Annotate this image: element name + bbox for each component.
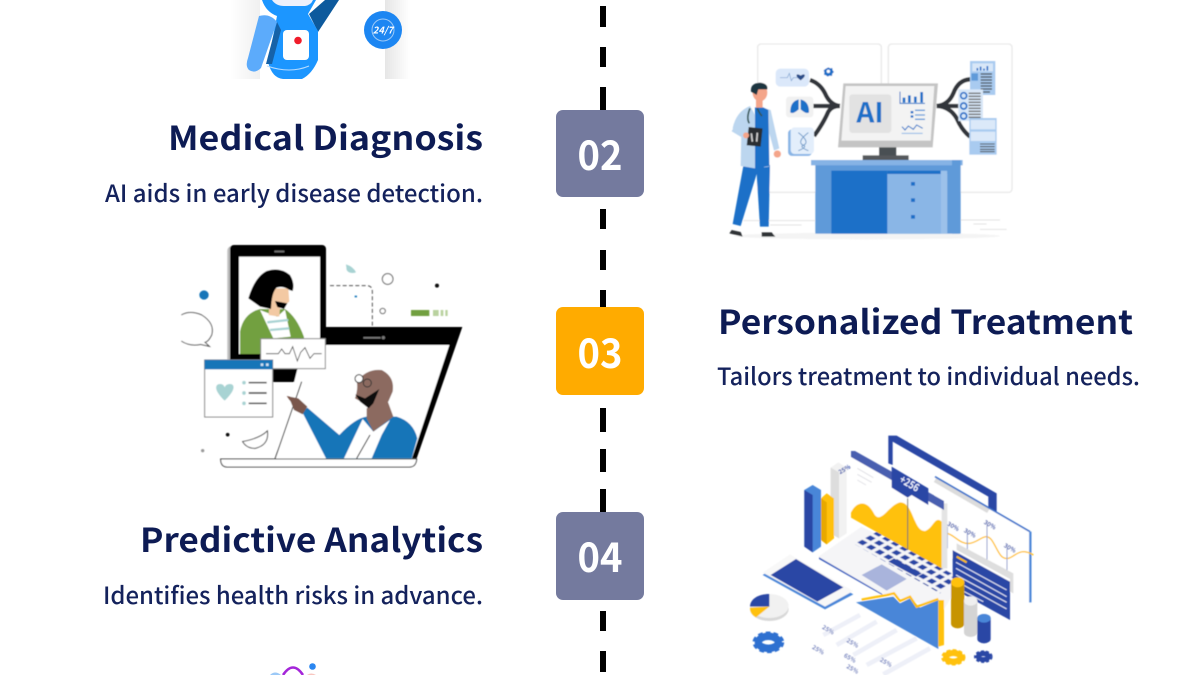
step badge 04 — [556, 512, 644, 600]
heart window — [205, 360, 273, 417]
laptop deck — [818, 527, 957, 609]
pie chart — [750, 594, 789, 621]
front area chart window — [851, 451, 947, 568]
value tag: +256 — [897, 472, 922, 495]
patient woman — [240, 270, 304, 354]
icon: robot with 24/7 badge — [230, 0, 410, 79]
left icons — [776, 67, 834, 156]
table rows — [811, 615, 930, 675]
desk — [811, 160, 963, 234]
3D bars — [804, 462, 852, 552]
phone — [763, 554, 853, 609]
dark window — [953, 543, 1013, 620]
cylinders — [951, 577, 991, 643]
back line chart panel — [935, 477, 1033, 602]
laptop screen — [275, 327, 462, 459]
monitor — [838, 83, 938, 160]
illustration: doctor with AI monitor — [729, 44, 1012, 239]
icon: robot with 24/7 badge: 24/7 — [373, 22, 395, 36]
step badge 03: 03 — [578, 320, 622, 380]
back line chart panel: 30% — [982, 517, 998, 532]
text: Predictive Analytics description: Identifies health risks in advance. — [103, 576, 483, 611]
back monitor — [888, 436, 997, 512]
step badge 04: 04 — [578, 524, 622, 584]
step badge 02: 02 — [578, 122, 622, 182]
step badge 03 — [556, 307, 644, 395]
illustration: telehealth video consult — [181, 245, 462, 467]
decorative icons — [181, 264, 448, 452]
back line chart panel: 30% — [1002, 541, 1018, 555]
doctor — [729, 83, 781, 237]
ground — [733, 220, 1007, 239]
step badge 02 — [556, 110, 644, 197]
heading: Medical Diagnosis: Medical Diagnosis — [168, 112, 483, 160]
3D bars: 25% — [836, 462, 852, 476]
right documents — [958, 61, 997, 155]
icon: partial colourful illustration at bottom edge — [270, 663, 316, 675]
table rows: 25% — [845, 636, 861, 650]
laptop base — [221, 459, 417, 467]
table rows: 65% — [842, 651, 858, 665]
table rows: 25% — [811, 642, 826, 657]
heading: Predictive Analytics: Predictive Analytics — [140, 514, 483, 562]
value tag — [892, 467, 928, 505]
text: Personalized Treatment description: Tailors treatment to individual needs. — [717, 357, 1140, 392]
dashed timeline — [600, 6, 606, 672]
table rows: 25% — [821, 622, 836, 637]
tablet — [227, 245, 326, 382]
area chart — [856, 593, 944, 649]
back line chart panel: 30% — [946, 519, 961, 533]
table rows: 25% — [878, 655, 894, 669]
connectors — [810, 79, 970, 137]
ecg card — [261, 339, 325, 369]
doctor man — [287, 370, 417, 458]
gears — [754, 633, 992, 664]
text: Medical Diagnosis description: AI aids in early disease detection. — [105, 174, 483, 209]
back line chart panel: 30% — [962, 526, 978, 540]
monitor: AI — [855, 92, 884, 132]
background panels — [758, 44, 1012, 192]
illustration: analytics isometric laptop — [750, 436, 1033, 675]
heading: Personalized Treatment: Personalized Treatment — [718, 296, 1133, 344]
